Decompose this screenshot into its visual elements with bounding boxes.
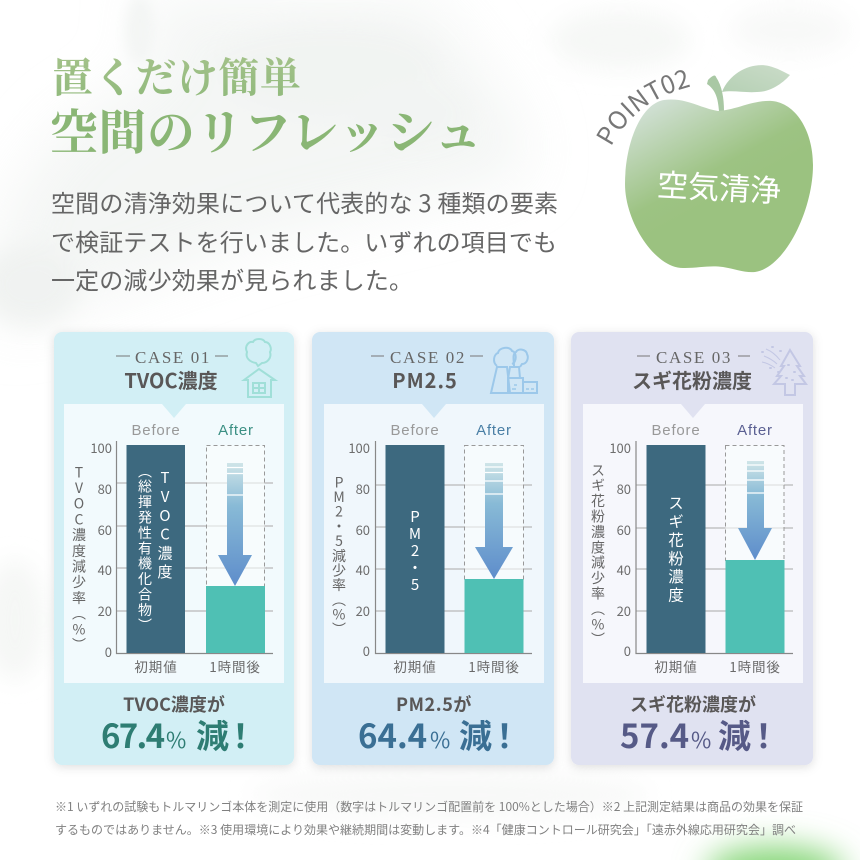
badge: apple POINT02: POINT02: [596, 70, 690, 145]
case 01 result: [101, 691, 257, 758]
arrow: [218, 463, 252, 586]
case 01 result: 67.4: [101, 710, 165, 758]
bar chart: cedar pollen: After: [737, 422, 773, 439]
case 01 heading: [116, 348, 228, 394]
intro text: 空間の清浄効果について代表的な 3 種類の要素: [51, 184, 558, 219]
arrow: [475, 463, 513, 579]
panel: case 01: [54, 332, 294, 765]
case 02 heading: [371, 348, 483, 394]
bar chart: cedar pollen: 60: [617, 520, 631, 539]
bar chart: PM2.5: 初期値: [393, 656, 437, 676]
bar chart: TVOC: （総揮発性有機化合物）: [135, 464, 155, 633]
case 02 heading: PM2.5: [392, 365, 458, 394]
bar chart: PM2.5: 0: [363, 641, 370, 660]
bar chart: cedar pollen: スギ花粉濃度: [665, 495, 687, 605]
bar chart: cedar pollen: 1時間後: [729, 656, 781, 676]
arrow: [738, 461, 772, 560]
case 01 heading: TVOC濃度: [124, 365, 218, 394]
title: 空間のリフレッシュ: [50, 94, 482, 163]
case 02 result: [358, 691, 521, 758]
case 02 result: ！: [488, 710, 521, 758]
bar chart: cedar pollen: 100: [609, 438, 631, 457]
bar chart: TVOC: Before: [132, 422, 180, 439]
case 01 result: %: [166, 723, 186, 755]
bar chart: PM2.5: 100: [348, 438, 370, 457]
bar chart: TVOC: [69, 422, 273, 676]
case 03 result: ！: [747, 710, 780, 758]
bar chart: PM2.5: 1時間後: [468, 656, 520, 676]
bar chart: PM2.5: 40: [356, 560, 370, 579]
case 02 result: 減: [459, 710, 492, 758]
case 03 heading: CASE 03: [656, 348, 732, 367]
POINT02 arc label: [611, 85, 697, 147]
bar chart: PM2.5: [329, 422, 532, 676]
footnotes: ※1 いずれの試験もトルマリンゴ本体を測定に使用（数字はトルマリンゴ配置前を 100%とした場合）※2 上記測定結果は商品の効果を保証: [55, 798, 803, 815]
apple label: 空気清浄: [656, 160, 782, 211]
bar chart: TVOC: TVOC濃度: [154, 470, 176, 583]
bar chart: TVOC: 20: [98, 601, 112, 620]
case 03 result: %: [691, 723, 711, 755]
bar chart: cedar pollen: 20: [617, 601, 631, 620]
icon: factory: [491, 348, 537, 393]
bar chart: PM2.5: Before: [390, 422, 440, 439]
case 03 heading: スギ花粉濃度: [632, 365, 752, 394]
icon: cedar tree with pollen: [762, 347, 806, 395]
case 01 heading: CASE 01: [135, 348, 211, 367]
panel: case 03: [571, 332, 813, 765]
bar chart: cedar pollen: 初期値: [654, 656, 698, 676]
bar chart: PM2.5: After: [476, 422, 512, 439]
bar chart: cedar pollen: Before: [652, 422, 700, 439]
bar chart: TVOC: TVOC濃度減少率（%）: [69, 465, 89, 653]
badge: apple POINT02: [596, 65, 813, 272]
title: [50, 45, 482, 163]
case 03 result: 57.4: [620, 710, 689, 758]
bar chart: cedar pollen: スギ花粉濃度減少率（%）: [588, 463, 608, 648]
bar chart: cedar pollen: 80: [617, 479, 631, 498]
icon: cloud and house: [244, 339, 275, 397]
bar chart: cedar pollen: 0: [624, 641, 631, 660]
bar chart: TVOC: 40: [98, 560, 112, 579]
case 02 result: %: [430, 723, 450, 755]
intro text: [51, 184, 558, 296]
intro text: 一定の減少効果が見られました。: [51, 261, 413, 296]
apple leaf: [722, 65, 790, 92]
bar chart: PM2.5: 80: [356, 479, 370, 498]
case 03 result: 減: [718, 710, 751, 758]
bar chart: TVOC: After: [218, 422, 254, 439]
bar chart: TVOC: 60: [98, 520, 112, 539]
bar chart: TVOC: 初期値: [134, 656, 178, 676]
apple body: [625, 99, 813, 272]
bar chart: TVOC: 0: [105, 642, 112, 661]
title: 置くだけ簡単: [52, 45, 301, 104]
bar chart: PM2.5: 20: [356, 601, 370, 620]
bar chart: PM2.5: PM2・5: [404, 509, 426, 594]
case 01 result: 減: [196, 710, 229, 758]
bar chart: TVOC: 1時間後: [209, 656, 261, 676]
bar chart: cedar pollen: 40: [617, 560, 631, 579]
intro text: で検証テストを行いました。いずれの項目でも: [51, 223, 557, 258]
case 01 result: TVOC濃度が: [123, 691, 225, 717]
panel: case 02: [312, 332, 554, 765]
apple stem: [707, 76, 724, 111]
case 02 result: 64.4: [358, 710, 427, 758]
bar chart: cedar pollen: [588, 422, 793, 676]
footnotes: [55, 798, 803, 838]
case 03 result: [620, 691, 780, 758]
case 03 result: スギ花粉濃度が: [630, 691, 756, 717]
case 02 result: PM2.5が: [396, 691, 472, 717]
footnotes: するものではありません。※3 使用環境により効果や継続期間は変動します。※4「健康コントロール研究会」「遠赤外線応用研究会」調べ: [55, 821, 796, 838]
case 03 heading: [632, 348, 752, 394]
case 01 result: ！: [224, 710, 257, 758]
case 02 heading: CASE 02: [390, 348, 466, 367]
bar chart: PM2.5: PM2・5減少率（%）: [329, 475, 349, 637]
bar chart: TVOC: 80: [98, 479, 112, 498]
bar chart: TVOC: 100: [90, 438, 112, 457]
bar chart: PM2.5: 60: [356, 520, 370, 539]
